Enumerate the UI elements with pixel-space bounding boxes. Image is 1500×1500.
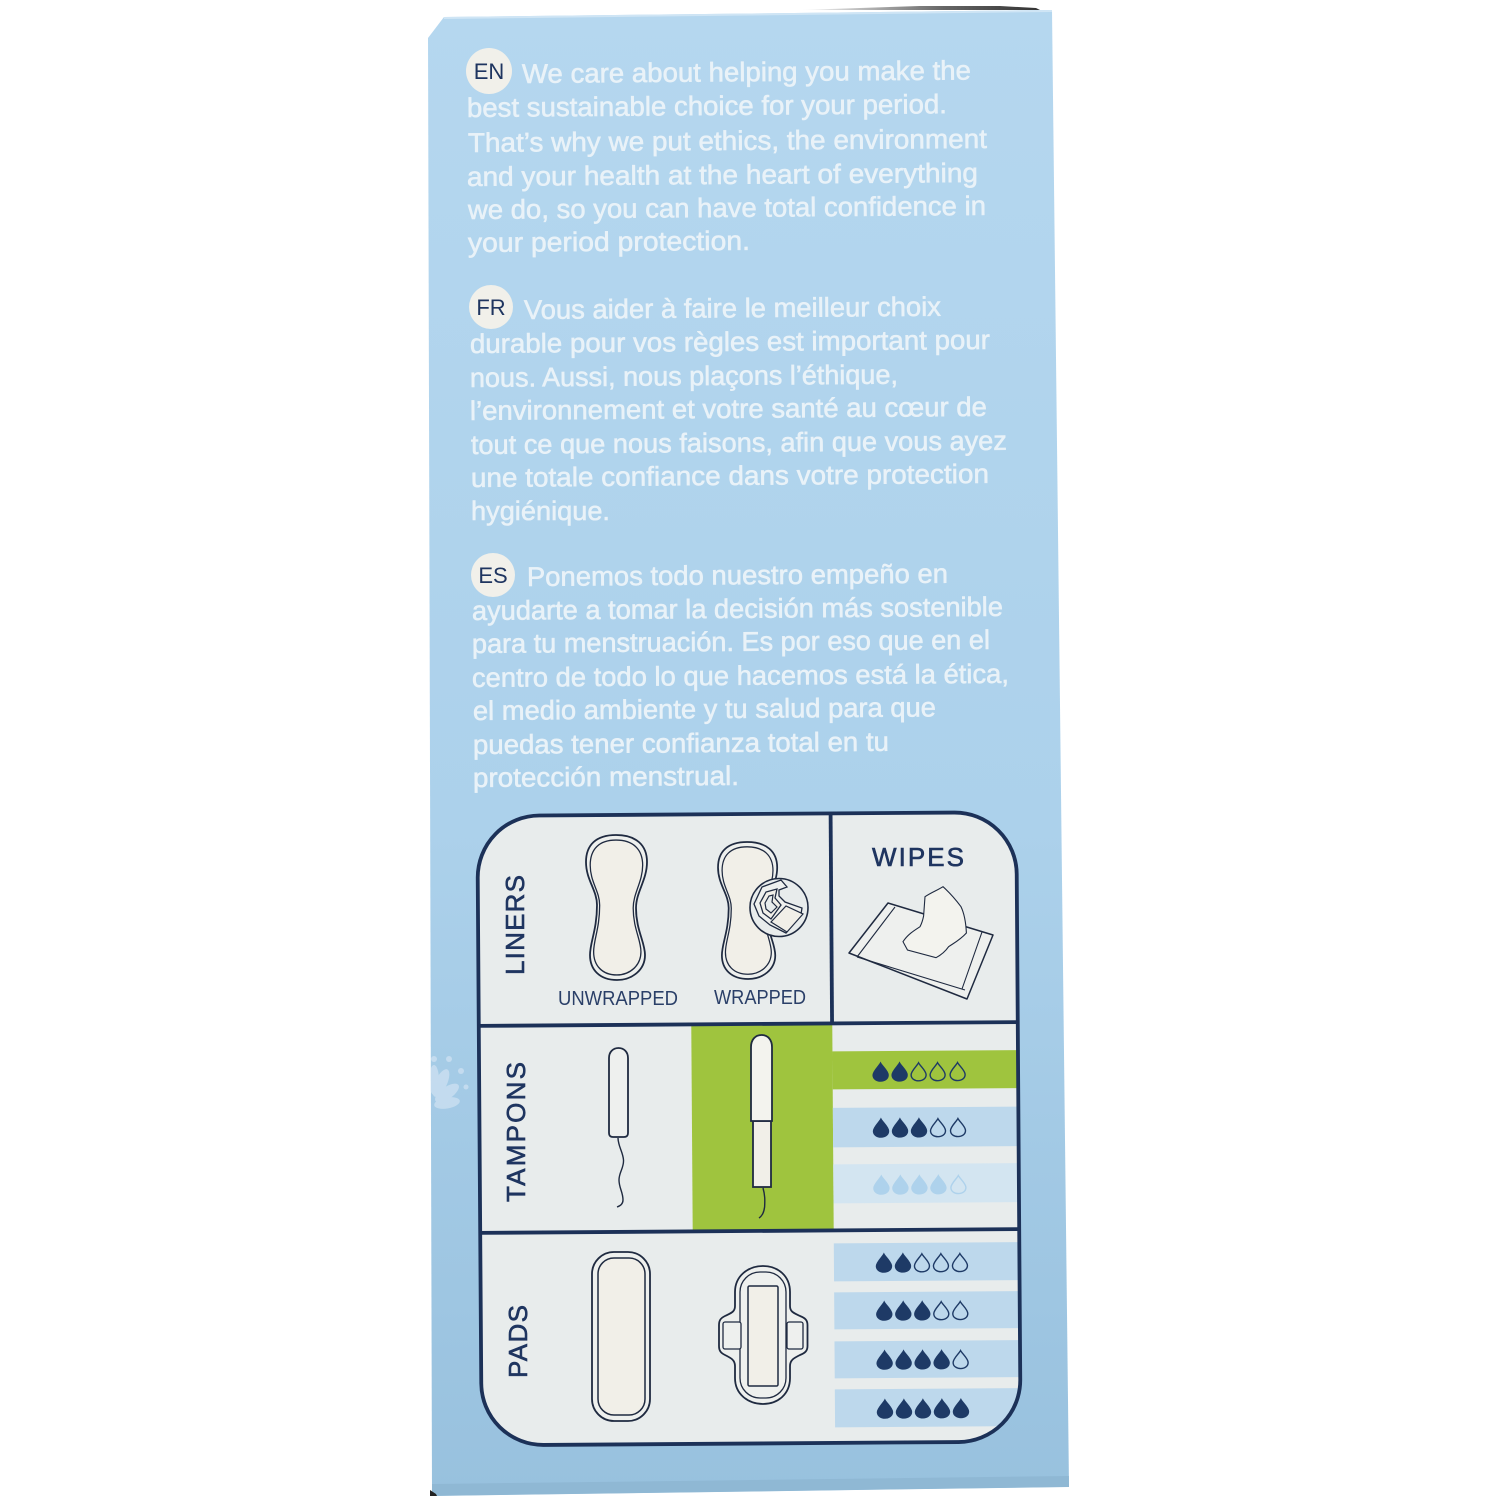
tampon absorbency row 1 <box>873 1062 965 1081</box>
text block: English: and your health at the heart of everything <box>467 158 978 192</box>
text block: English: we do, so you can have total confidence in <box>467 191 986 225</box>
text block: English <box>466 48 988 258</box>
decorative flower at left edge <box>429 1056 468 1111</box>
text block: French: tout ce que nous faisons, afin que vous ayez <box>471 426 1007 460</box>
panel: box side background <box>428 10 1069 1496</box>
pad absorbency row 1 <box>876 1253 967 1272</box>
icon: wrapper detail inset <box>750 878 808 936</box>
text block: French: hygiénique. <box>471 496 610 526</box>
text block: Spanish <box>471 553 1009 793</box>
badge: ES: ES <box>478 563 508 588</box>
icon: unwrapped liner <box>586 835 647 980</box>
pad absorbency row 3 <box>877 1350 968 1369</box>
text block: French: durable pour vos règles est important pour <box>470 325 990 359</box>
icon: wrapped liner <box>718 842 808 979</box>
text block: English: your period protection. <box>468 226 750 258</box>
panel: product table <box>477 812 1021 1445</box>
label: TAMPONS: TAMPONS <box>501 1062 531 1202</box>
text block: French: Vous aider à faire le meilleur choix <box>524 292 942 325</box>
text block: French: une totale confiance dans votre protection <box>471 459 989 493</box>
shadow line on top of box <box>800 6 1040 10</box>
text block: Spanish: ayudarte a tomar la decisión más sostenible <box>472 592 1003 626</box>
text block: Spanish: puedas tener confianza total en tu <box>473 727 889 760</box>
label: UNWRAPPED: UNWRAPPED <box>558 988 678 1010</box>
label: WIPES: WIPES <box>872 842 964 872</box>
text block: Spanish: el medio ambiente y tu salud para que <box>473 692 936 726</box>
text block: English: We care about helping you make the <box>522 55 971 89</box>
badge: ES <box>471 553 515 597</box>
text block: French: nous. Aussi, nous plaçons l’éthique, <box>470 360 898 393</box>
label: WRAPPED: WRAPPED <box>714 987 806 1009</box>
icon: tampon without applicator <box>609 1048 628 1207</box>
badge: FR: FR <box>476 295 506 320</box>
label: LINERS: LINERS <box>500 875 530 975</box>
tampon absorbency row 2 <box>873 1118 966 1137</box>
icon: wipes pack <box>849 887 993 999</box>
wipe tissue <box>903 887 966 958</box>
text block: English: best sustainable choice for your period. <box>467 89 947 123</box>
icon: pad with wings <box>719 1266 808 1404</box>
text block: French <box>469 285 1007 526</box>
pad absorbency row 2 <box>877 1301 968 1320</box>
text block: Spanish: para tu menstruación. Es por eso que en el <box>472 625 990 659</box>
icon: pad without wings <box>592 1252 650 1421</box>
icon: tampon with applicator <box>751 1035 772 1218</box>
text block: Spanish: Ponemos todo nuestro empeño en <box>527 559 948 592</box>
text block: French: l’environnement et votre santé au cœur de <box>470 392 987 426</box>
text block: Spanish: protección menstrual. <box>473 761 739 793</box>
text block: English: That’s why we put ethics, the environment <box>468 124 988 158</box>
badge: EN: EN <box>474 59 504 84</box>
text block: Spanish: centro de todo lo que hacemos está la ética, <box>472 659 1009 693</box>
label: PADS: PADS <box>503 1305 533 1378</box>
badge: EN <box>466 48 512 94</box>
pad absorbency row 4 <box>877 1399 969 1418</box>
badge: FR <box>469 285 513 329</box>
tampon absorbency row 3 <box>874 1175 966 1194</box>
